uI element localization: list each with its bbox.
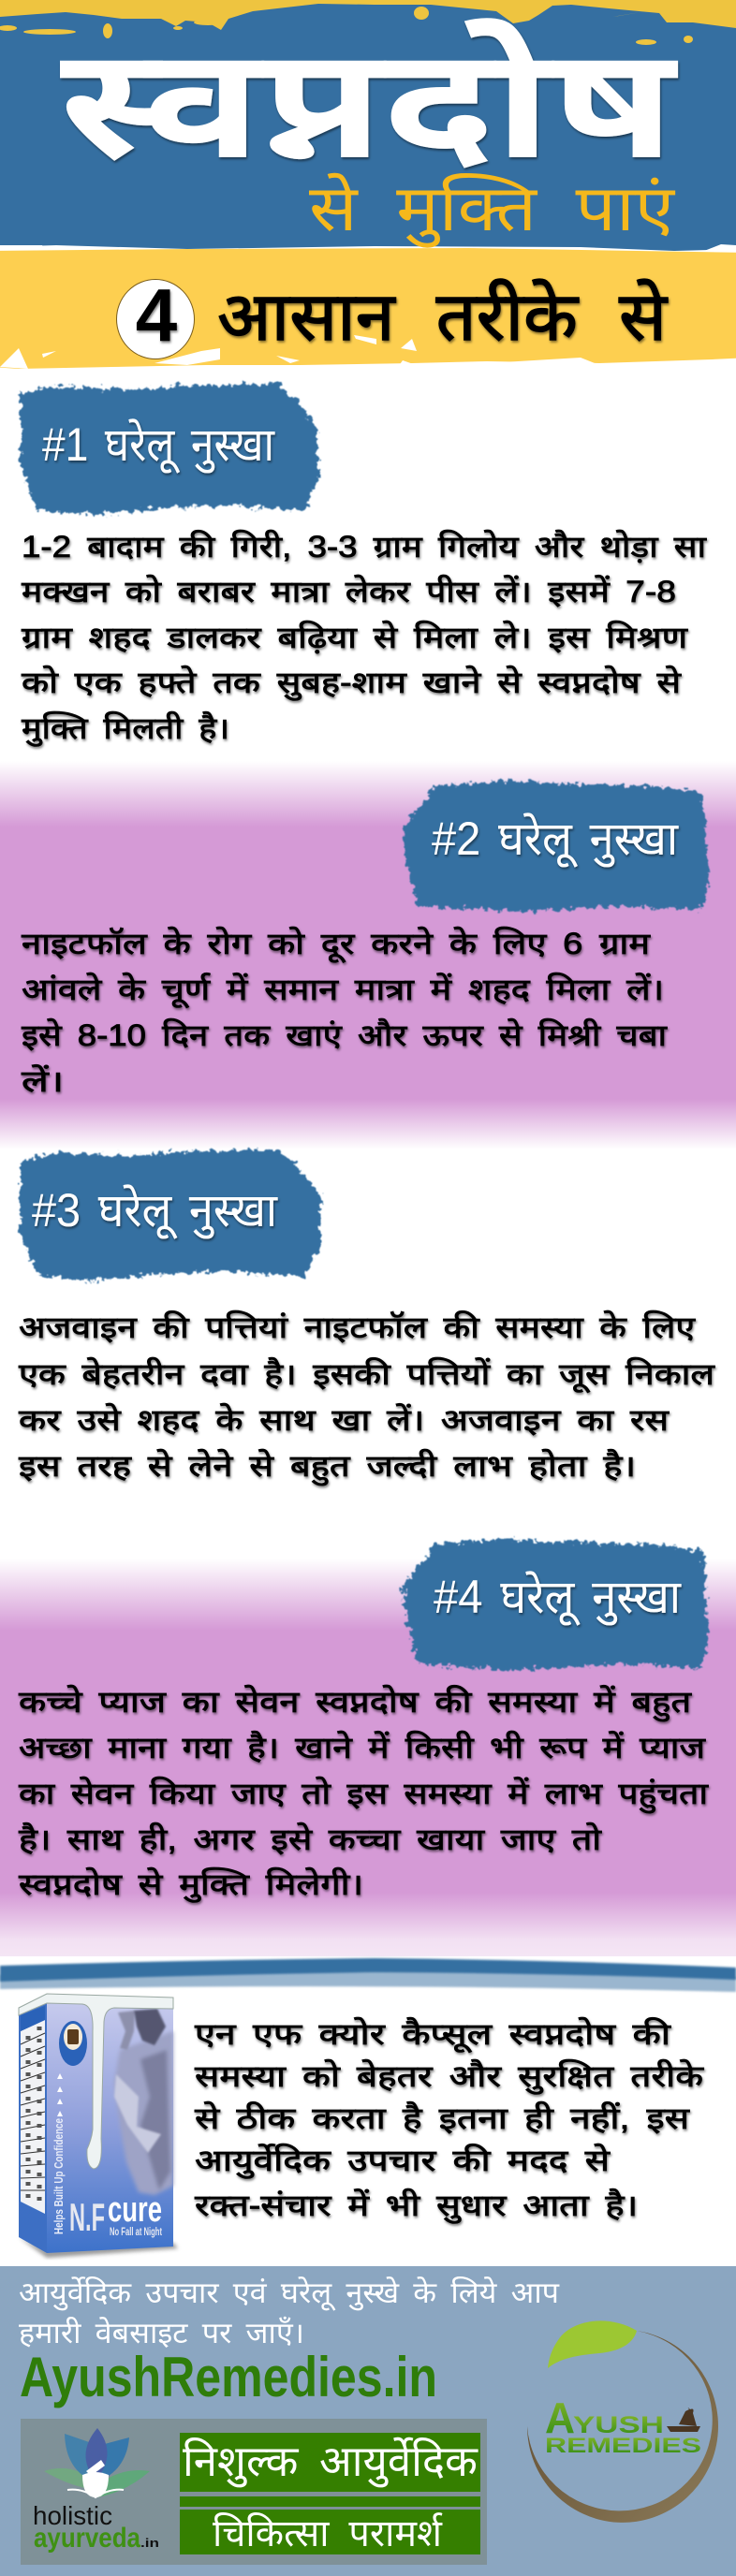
remedy 4 text [19, 1685, 709, 1903]
box brand name [69, 2190, 162, 2239]
logo ring [527, 2331, 718, 2523]
logo leaf [548, 2320, 637, 2368]
remedy 3 text [19, 1310, 716, 1486]
remedy 3 text: इस तरह से लेने से बहुत जल्दी लाभ होता है। [19, 1449, 636, 1486]
green box: consultation: चिकित्सा परामर्श [213, 2512, 443, 2554]
product text: से ठीक करता है इतना ही नहीं, इस [195, 2101, 691, 2135]
logo mortar figure [667, 2408, 700, 2432]
remedy 2 text: आंवले के चूर्ण में समान मात्रा में शहद मिला लें। [22, 973, 664, 1008]
remedy 4 text: कच्चे प्याज का सेवन स्वप्नदोष की समस्या में बहुत [19, 1685, 692, 1722]
remedy 2 text: नाइटफॉल के रोग को दूर करने के लिए 6 ग्राम [22, 927, 651, 963]
box tagline: Helps Built Up Confidence [52, 2118, 66, 2234]
header: yellow band [0, 248, 736, 369]
ayush remedies logo [527, 2320, 718, 2523]
remedy 1 text: को एक हफ्ते तक सुबह-शाम खाने से स्वप्नदोष से [22, 666, 683, 701]
logo wordmark: YUSH [573, 2412, 664, 2438]
remedy 2 heading: #2 घरेलू नुस्खा [432, 812, 679, 869]
title: स्वप्नदोष [60, 18, 678, 191]
header: white flecks [0, 335, 736, 369]
product text: एन एफ क्योर कैप्सूल स्वप्नदोष की [195, 2017, 671, 2053]
product text: रक्त-संचार में भी सुधार आता है। [195, 2188, 638, 2224]
remedy 2 text: लें। [22, 1064, 64, 1098]
remedy 1 text: मक्खन को बराबर मात्रा लेकर पीस लें। इसमें 7-8 [22, 575, 676, 608]
holistic ayurveda logo: holistic [33, 2501, 112, 2530]
logo wordmark: A [545, 2393, 575, 2442]
remedy 2 heading [403, 781, 710, 912]
background: pink band remedy 2 [0, 761, 736, 1149]
remedy 1 text: मुक्ति मिलती है। [22, 711, 229, 747]
box front face [47, 1998, 173, 2253]
box brand name: No Fall at Night [110, 2225, 162, 2238]
badge: number 4 [116, 273, 195, 359]
remedy 4 heading: #4 घरेलू नुस्खा [434, 1571, 682, 1627]
brand emblem [59, 2021, 87, 2066]
consultation panel [21, 2419, 487, 2565]
remedy 1 heading: #1 घरेलू नुस्खा [42, 418, 275, 475]
badge: number 4: 4 [136, 273, 178, 357]
holistic ayurveda logo: ayurveda [34, 2523, 140, 2554]
product text [195, 2017, 705, 2224]
remedy 2 text: इसे 8-10 दिन तक खाएं और ऊपर से मिश्री चबा [22, 1018, 668, 1052]
remedy 3 text: एक बेहतरीन दवा है। इसकी पत्तियों का जूस निकाल [19, 1357, 716, 1393]
holistic ayurveda logo [33, 2428, 159, 2554]
remedy 3 text: अजवाइन की पत्तियां नाइटफॉल की समस्या के लिए [19, 1310, 697, 1344]
remedy 4 text: स्वप्नदोष से मुक्ति मिलेगी। [19, 1867, 363, 1903]
remedy 3 heading: #3 घरेलू नुस्खा [32, 1184, 278, 1240]
box shadow [19, 2237, 178, 2258]
box brand name: cure [108, 2190, 162, 2230]
product text: समस्या को बेहतर और सुरक्षित तरीके [195, 2059, 705, 2095]
website name: AyushRemedies.in [20, 2346, 437, 2408]
logo wordmark: REMEDIES [545, 2434, 701, 2457]
milk drip top [19, 1994, 173, 2169]
remedy 4 heading [403, 1539, 710, 1670]
heading: easy ways: आसान तरीके से [217, 278, 668, 355]
remedy 4 text: का सेवन किया जाए तो इस समस्या में लाभ पहुंचता [19, 1777, 709, 1814]
remedy 1 heading [21, 384, 318, 515]
green box: free ayurvedic: निशुल्क आयुर्वेदिक [183, 2437, 479, 2489]
box droplets [57, 2073, 63, 2116]
remedy 2 text [22, 927, 668, 1098]
footer intro text [19, 2276, 560, 2349]
background: pink band remedy 4 [0, 1559, 736, 1956]
side panel table [21, 2006, 45, 2214]
footer intro text: हमारी वेबसाइट पर जाएँ। [19, 2317, 304, 2349]
header: blue band [0, 0, 736, 251]
remedy 3 heading [21, 1149, 320, 1281]
remedy 1 text [22, 530, 707, 747]
couple illustration [114, 2009, 173, 2195]
remedy 1 text: ग्राम शहद डालकर बढ़िया से मिला ले। इस मिश्रण [22, 621, 688, 654]
remedy 3 text: कर उसे शहद के साथ खा लें। अजवाइन का रस [19, 1403, 670, 1437]
product text: आयुर्वेदिक उपचार की मदद से [195, 2144, 611, 2179]
header: yellow torn top edge [0, 0, 736, 45]
logo wordmark [545, 2393, 701, 2457]
divider: blue brush stripe [0, 1958, 736, 1992]
footer intro text: आयुर्वेदिक उपचार एवं घरेलू नुस्खे के लिये आप [19, 2276, 560, 2311]
box brand name: N.F [69, 2195, 105, 2239]
header: white torn edges [0, 244, 736, 251]
footer panel [0, 2266, 736, 2576]
holistic ayurveda logo: .in [140, 2536, 159, 2550]
subtitle: से मुक्ति पाएं [309, 173, 676, 247]
remedy 4 text: है। साथ ही, अगर इसे कच्चा खाया जाए तो [19, 1822, 602, 1856]
remedy 4 text: अच्छा माना गया है। खाने में किसी भी रूप में प्याज [19, 1731, 706, 1764]
product: NF Cure box [19, 1994, 178, 2258]
box side panel [19, 1999, 47, 2253]
remedy 1 text: 1-2 बादाम की गिरी, 3-3 ग्राम गिलोय और थोड़ा सा [22, 530, 707, 564]
